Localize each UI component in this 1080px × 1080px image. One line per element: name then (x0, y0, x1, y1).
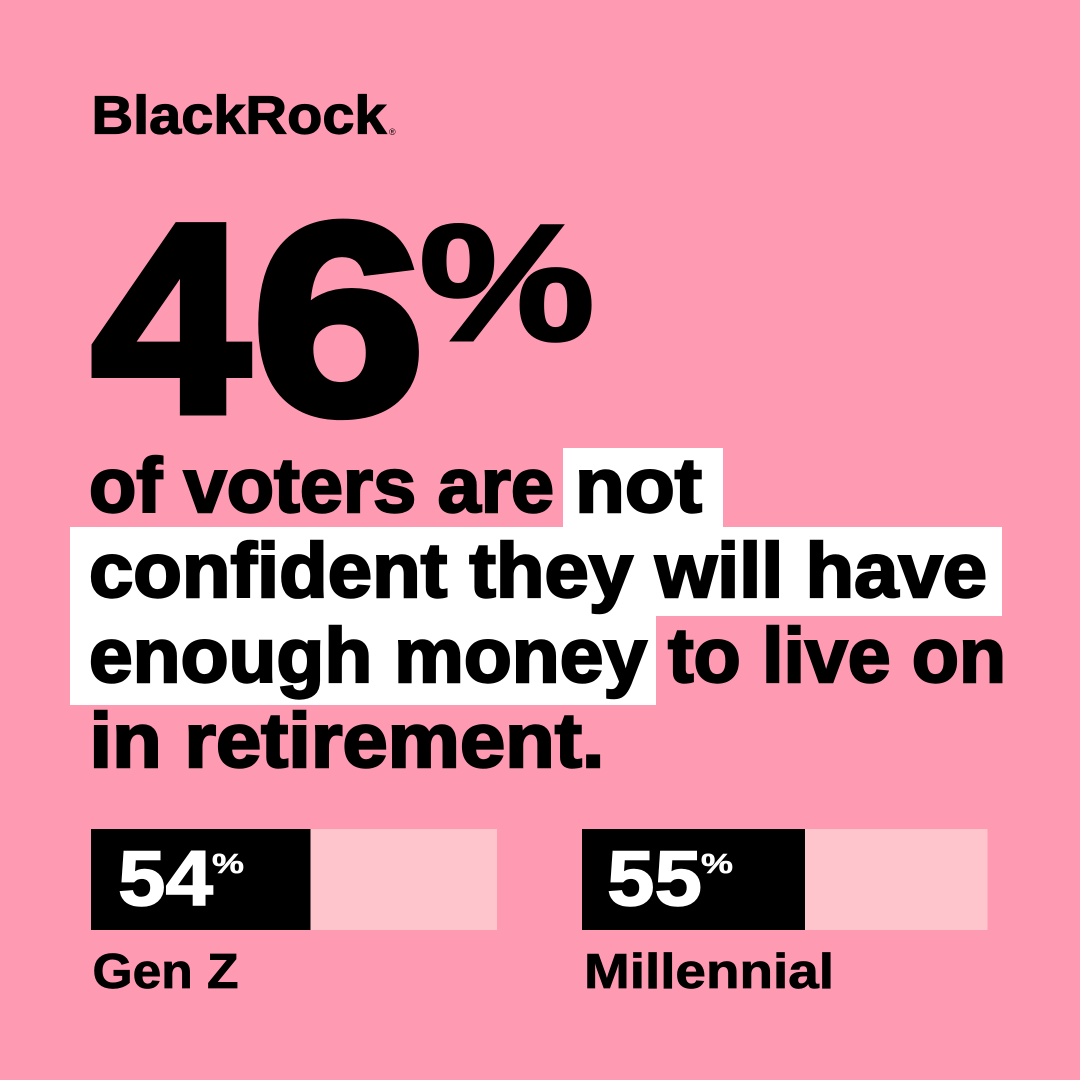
label: Gen Z: Gen Z (92, 945, 238, 999)
headline statement: to live on (668, 613, 1006, 699)
big statistic: 46% (92, 167, 595, 471)
bar: Millennial 55%: 55 (607, 834, 702, 922)
headline statement: in retirement. (90, 698, 604, 784)
headline statement: of voters are (89, 443, 554, 529)
big statistic: 46%: 6 (252, 167, 425, 471)
logo: BlackRock: ® (389, 127, 396, 137)
bar: Gen Z 54%: 54 (118, 834, 213, 922)
bar: Millennial 55%: % (701, 848, 733, 879)
bar: Gen Z 54% (91, 829, 497, 930)
bar: Millennial 55% (582, 829, 988, 930)
big statistic: 46%: 4 (92, 168, 251, 468)
label: Millennial: Millennial (584, 945, 834, 999)
bar: Gen Z 54%: % (212, 848, 244, 879)
headline statement: enough money (89, 613, 647, 699)
headline statement (89, 443, 1006, 784)
headline statement: confident they will have (89, 528, 987, 614)
logo: BlackRock: BlackRock (92, 86, 388, 146)
headline statement: not (575, 443, 702, 529)
big statistic: 46%: % (419, 191, 595, 376)
white highlight behind key phrase (70, 448, 1002, 705)
